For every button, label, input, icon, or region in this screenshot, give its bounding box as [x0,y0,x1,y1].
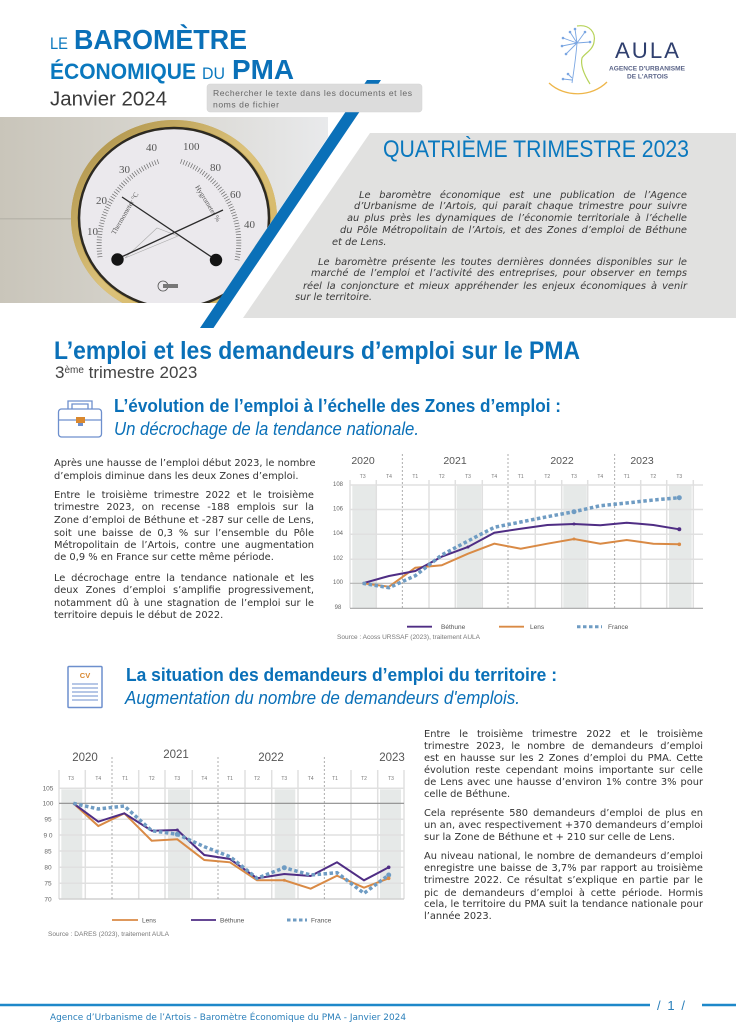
line: France [73,803,389,893]
quarter labels: T1 [624,474,630,480]
section sub-heading: ème [64,365,84,376]
chart: emploi [333,454,703,641]
title: LE [50,34,68,53]
quarter labels: T2 [361,776,367,782]
text block: demandeurs analysis [424,729,704,922]
text block: demandeurs analysis: Entre le troisième trimestre 2022 et le troisième [424,729,703,740]
section sub-heading: trimestre 2023 [84,363,197,382]
y axis labels: 9 0 [43,832,53,840]
text block: emploi analysis: Le décrochage entre la tendance nationale et les [54,573,314,584]
text block: emploi analysis: d’emplois diminue dans les deux Zones d’emploi. [54,471,299,482]
text block: demandeurs analysis: Cela représente 580 demandeurs d’emploi de plus en [424,808,703,819]
year labels: 2020 [72,752,98,764]
quarter labels: T4 [597,474,603,480]
diagonal blue stripe [200,80,381,328]
section sub-heading: 3 [55,363,64,382]
text block: demandeurs analysis: évolution reste cependant moins importante sur celle [424,765,703,776]
text block: demandeurs analysis: l’année 2023. [424,911,492,922]
year labels: 2021 [443,455,467,467]
section heading: emploi: L’emploi et les demandeurs d’emploi sur le PMA [54,337,580,365]
year labels [351,455,654,467]
photo: thermometer gauge: 40 [244,219,256,231]
title [50,24,294,85]
quarter labels: T1 [518,474,524,480]
tooltip: noms de fichier [213,100,279,110]
y axis labels: 80 [44,864,52,872]
legend [407,624,629,631]
tooltip: Rechercher le texte dans les documents et les [213,88,412,98]
photo: thermometer gauge: 10 [87,226,98,238]
source: Source : DARES (2023), traitement AULA [48,931,170,938]
text block: intro: sur le territoire. [295,292,372,303]
line: Béthune [363,523,679,583]
y axis labels [333,482,344,611]
year labels [72,749,405,764]
quarter labels: T3 [360,474,366,480]
logo: AULA: AGENCE D'URBANISME [609,66,686,72]
y axis labels: 85 [44,848,52,856]
text block: intro: du Pôle Métropolitain de l’Artois, et des Zones d’emploi de Béthune [340,225,687,236]
text block: emploi analysis: soit une baisse de 0,3 % sur l’ensemble du Pôle [54,528,314,539]
y axis labels: 100 [333,580,344,586]
icon: briefcase [58,401,102,437]
logo: AULA: DE L'ARTOIS [627,74,669,80]
line: Lens [363,539,679,587]
y axis labels: 105 [43,786,54,792]
year labels: 2022 [550,455,574,467]
line: Lens [73,803,389,889]
icon: CV document: CV [80,671,90,680]
text block: intro: Le baromètre présente les toutes dernières données disponibles sur le [318,257,687,268]
year labels: 2023 [379,752,405,764]
text block: intro: réel la conjoncture et mieux appréhender les enjeux économiques à venir [303,281,687,292]
quarter labels: T3 [676,474,682,480]
quarter labels: T1 [122,776,128,782]
photo: thermometer gauge: Hygrometer % [193,184,222,223]
text block: emploi analysis: Métropolitain de l’Artois, contre une augmentation [54,540,314,551]
line: Béthune [73,803,389,880]
legend: Béthune [441,624,466,631]
legend: France [311,918,332,924]
quarter labels: T1 [227,776,233,782]
footer rule [0,1004,736,1006]
text block: intro: marché de l’emploi et l’activité des entreprises, pour observer en temps [311,268,687,279]
quarter labels: T4 [386,474,392,480]
panel: grey intro background [243,133,736,318]
page number: / 1 / [657,998,685,1013]
tooltip [207,84,422,112]
quarter labels: T3 [174,776,180,782]
year labels: 2023 [630,455,654,467]
quarter labels: T3 [465,474,471,480]
quarter labels: T4 [308,776,314,782]
title: BAROMÈTRE [74,24,247,55]
legend [112,918,332,924]
quarter labels: T2 [254,776,260,782]
text block: demandeurs analysis: pic de demandeurs d’emploi à cette période. Hormis [424,888,703,899]
y axis labels: 100 [43,800,54,808]
icon: CV document [68,666,102,708]
y axis labels: 70 [44,896,52,904]
subheading: augmentation: Augmentation du nombre de demandeurs d'emplois. [124,687,520,708]
text block: demandeurs analysis: sur la Zone de Béthune et + 210 sur celle de Lens. [424,832,675,843]
text block: intro: Le baromètre économique est une publication de l’Agence [359,190,687,201]
text block: emploi analysis: territoire depuis le début de 2022. [54,610,223,621]
quarter labels: T2 [439,474,445,480]
y axis labels: 95 [44,816,52,824]
quarter labels: T4 [95,776,101,782]
photo: thermometer gauge: 30 [119,164,130,176]
text block: demandeurs analysis: enregistre une baisse de 3,7% par rapport au troisième [424,863,703,874]
text block: emploi analysis: Après une hausse de l’emploi début 2023, le nombre [54,458,316,469]
title: DU [202,64,225,83]
text block: demandeurs analysis: cela, le territoire du PMA suit la tendance nationale pour [424,899,703,910]
legend: Lens [530,624,545,631]
subheading: décrochage: Un décrochage de la tendance nationale. [114,418,419,439]
y axis labels [43,786,54,904]
y axis labels: 108 [333,482,344,488]
title: PMA [232,54,294,85]
text block: emploi analysis: de 0,9 % en France sur cette même période. [54,552,274,563]
year labels: 2020 [351,455,375,467]
text block: demandeurs analysis: de Lens avec une hausse d’environ 1% contre 3% pour [424,777,703,788]
photo: thermometer gauge: 100 [183,141,200,153]
text block: demandeurs analysis: trimestre 2022. Ce résultat s’explique en partie par le [424,875,703,886]
y axis labels: 98 [335,605,342,611]
year labels: 2021 [163,749,189,761]
text block: intro: d’Urbanisme de l’Artois, qui parait chaque trimestre pour suivre [354,201,687,212]
y axis labels: 102 [333,556,344,562]
logo: AULA: AULA [615,38,681,63]
quarter heading: QUATRIÈME TRIMESTRE 2023 [383,136,689,163]
y axis labels: 104 [333,531,344,537]
quarter labels: T4 [201,776,207,782]
quarter labels: T3 [68,776,74,782]
photo: thermometer gauge: Thermometer °C [110,191,141,236]
text block: demandeurs analysis: est en hausse sur les 2 Zones d’emploi du PMA. Cette [424,753,703,764]
quarter labels [68,776,394,782]
photo: thermometer gauge: 80 [210,162,222,174]
text block: intro: au plus près les dynamiques de l’économie territoriale à l’échelle [347,213,687,224]
y axis labels: 75 [44,880,52,888]
footer text: Agence d’Urbanisme de l’Artois - Baromètre Économique du PMA - Janvier 2024 [50,1011,406,1023]
title: ÉCONOMIQUE [50,59,196,84]
quarter labels [360,474,682,480]
text block: emploi analysis: Zone d’emploi de Béthune et -287 sur celle de Lens, [54,515,314,526]
legend: France [608,624,629,631]
text block: demandeurs analysis: celle de Béthune. [424,789,510,800]
logo: AULA [549,26,686,94]
quarter labels: T2 [544,474,550,480]
text block: demandeurs analysis: Au niveau national, le nombre de demandeurs d’emploi [424,851,703,862]
quarter labels: T2 [149,776,155,782]
source: Source : Acoss URSSAF (2023), traitement AULA [337,634,481,641]
photo: thermometer gauge: 20 [96,195,108,207]
quarter labels: T1 [332,776,338,782]
date: Janvier 2024 [50,88,167,110]
heading: demandeurs d'emploi: La situation des demandeurs d’emploi du territoire : [126,664,557,685]
text block: emploi analysis: Entre le troisième trimestre 2022 et le troisième [54,490,314,501]
text block: intro [295,190,688,303]
quarter labels: T4 [491,474,497,480]
year labels: 2022 [258,752,284,764]
y axis labels: 106 [333,506,344,512]
quarter labels: T3 [388,776,394,782]
text block: demandeurs analysis: trimestre 2023, le nombre de demandeurs d’emploi [424,741,703,752]
chart: demandeurs d'emploi [43,749,405,938]
text block: intro: et de Lens. [332,237,387,248]
quarter labels: T1 [412,474,418,480]
text block: demandeurs analysis: un an, avec respectivement +370 demandeurs d’emploi [424,820,703,831]
text block: emploi analysis: notamment dû à une stagnation de l’emploi sur le [54,598,314,609]
legend: Lens [142,918,157,924]
quarter labels: T3 [281,776,287,782]
text block: emploi analysis: trimestre 2023, on recense -188 emplois sur la [54,502,314,513]
text block: emploi analysis [54,458,316,621]
heading: évolution de l'emploi: L’évolution de l’emploi à l’échelle des Zones d’emploi : [114,395,561,416]
text block: emploi analysis: deux Zones d’emploi s’amplifie progressivement, [54,585,314,596]
photo: thermometer gauge: 40 [146,142,158,154]
quarter labels: T2 [650,474,656,480]
legend: Béthune [220,918,245,924]
photo: thermometer gauge: 60 [230,189,242,201]
line: France [363,498,679,588]
quarter labels: T3 [571,474,577,480]
photo: thermometer gauge [0,117,330,316]
